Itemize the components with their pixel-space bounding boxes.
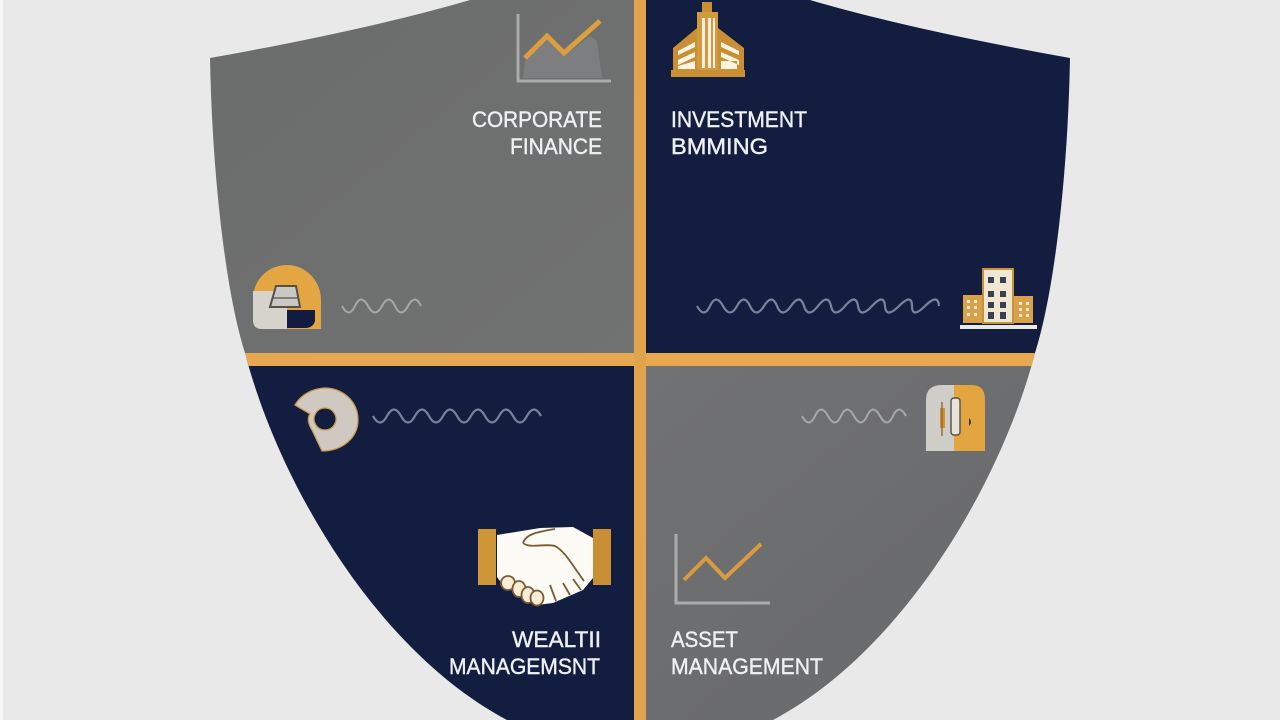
gold vertical divider (634, 0, 646, 720)
heading: wealth management (449, 627, 601, 679)
heading: asset management: ASSET (671, 627, 738, 652)
wavy placeholder line: corporate finance (342, 300, 421, 312)
shield (200, 0, 1080, 720)
icon: corporate finance line chart (518, 14, 611, 81)
icon: asset management line chart (676, 534, 770, 603)
icon: hat badge (253, 265, 321, 329)
icon: candlestick badge (926, 385, 985, 451)
heading: corporate finance (472, 107, 602, 159)
heading: investment banking: INVESTMENT (671, 107, 807, 132)
heading: asset management: MANAGEMENT (671, 654, 823, 679)
heading: investment banking: BMMING (671, 134, 768, 159)
heading: asset management (671, 627, 823, 679)
wavy placeholder line: asset management (802, 410, 906, 422)
heading: corporate finance: CORPORATE (472, 107, 602, 132)
wavy placeholder line: investment banking (697, 300, 939, 312)
icon: donut (295, 388, 358, 451)
panel: investment banking quadrant (640, 0, 1080, 360)
icon: investment bank building (671, 2, 745, 77)
panel: corporate finance quadrant (200, 0, 640, 360)
heading: wealth management: MANAGEMSNT (449, 654, 600, 679)
wavy placeholder line: wealth management (373, 410, 541, 422)
heading: wealth management: WEALTII (512, 627, 601, 652)
icon: handshake (478, 527, 611, 606)
heading: corporate finance: FINANCE (510, 134, 602, 159)
gold horizontal divider (245, 353, 1035, 366)
panel: asset management quadrant (646, 360, 1034, 720)
heading: investment banking (671, 107, 807, 159)
panel: wealth management quadrant (246, 360, 634, 720)
icon: office buildings (960, 269, 1037, 329)
